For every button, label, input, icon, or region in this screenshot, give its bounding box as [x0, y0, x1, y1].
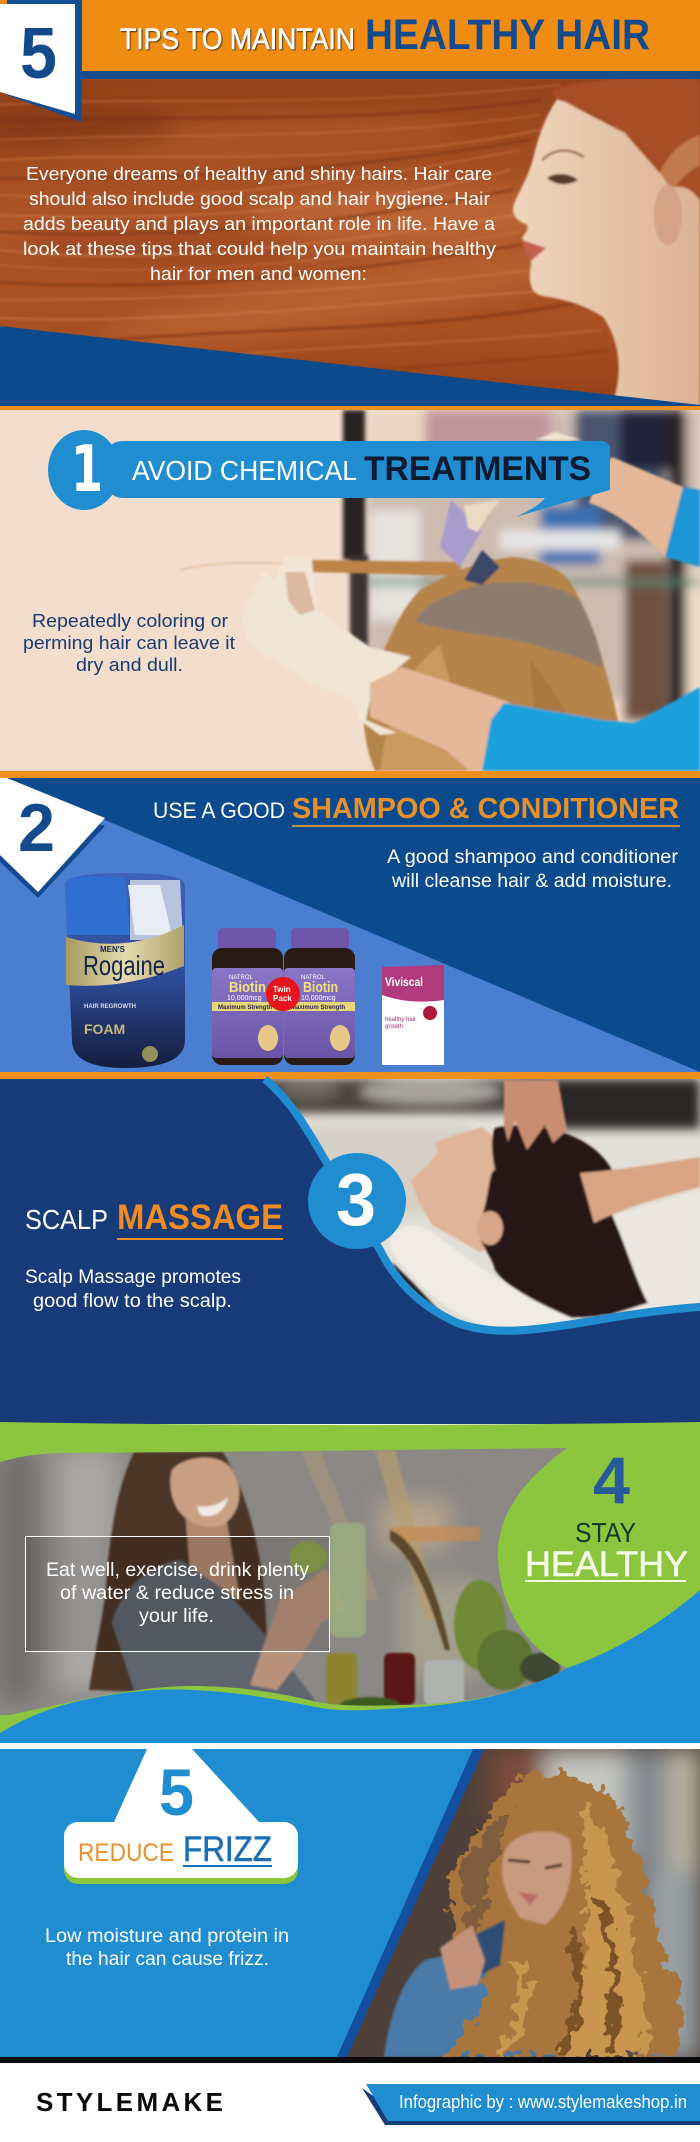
- heading: SHAMPOO & CONDITIONER: [292, 793, 679, 825]
- body text: will cleanse hair & add moisture.: [391, 871, 672, 892]
- panel: tip 5 reduce frizz: [0, 1749, 700, 2063]
- title: HEALTHY HAIR: [365, 11, 650, 59]
- product: Biotin twin pack: 10,000mcg: [227, 995, 262, 1002]
- intro text: Everyone dreams of healthy and shiny hairs. Hair care: [26, 163, 492, 184]
- text box: Eat well, exercise, drink plenty: [46, 1560, 310, 1581]
- body text: [387, 847, 679, 892]
- badge and speech bubble: [48, 430, 610, 517]
- heading: 4 stay healthy: 4: [593, 1443, 630, 1517]
- badge and speech bubble: 1: [71, 433, 103, 507]
- panel: tip 3 scalp massage: [0, 1079, 700, 1424]
- body text: Low moisture and protein in: [45, 1926, 289, 1947]
- comb and brush: [440, 500, 482, 567]
- text box: your life.: [139, 1606, 214, 1627]
- heading badge: 5: [159, 1755, 194, 1829]
- orange divider: [0, 771, 700, 778]
- curved blue edge: [265, 1079, 700, 1331]
- hair: [478, 1125, 648, 1318]
- body text: A good shampoo and conditioner: [387, 847, 679, 868]
- product: Viviscal: growth: [385, 1024, 403, 1030]
- product: Biotin twin pack: Maximum Strength: [291, 1005, 345, 1011]
- header bar: [0, 0, 700, 79]
- product: Rogaine: [65, 873, 185, 1068]
- body text: Scalp Massage promotes: [25, 1267, 241, 1288]
- panel: tip 1 avoid chemical treatments: [0, 410, 700, 778]
- badge and speech bubble: AVOID CHEMICAL: [132, 455, 357, 486]
- photo: woman with apple and bottles: [0, 1445, 600, 1715]
- heading badge: FRIZZ: [183, 1830, 272, 1869]
- hands: [504, 1080, 567, 1150]
- lower blue wave: [0, 1590, 700, 1743]
- product: Biotin twin pack: [212, 928, 355, 1065]
- diagonal stripe: [337, 1749, 490, 2057]
- face: [513, 78, 700, 406]
- forearm: [370, 667, 509, 771]
- photo: salon hair colouring: [0, 410, 700, 771]
- product: Rogaine: MEN'S: [100, 945, 126, 954]
- jacket: [382, 1955, 556, 2057]
- logo wordmark: STYLEMAKE: [36, 2087, 223, 2117]
- face: [502, 1831, 572, 1925]
- credit ribbon: [362, 2084, 700, 2125]
- panel: intro hero: [0, 78, 700, 410]
- body text: [25, 1267, 241, 1312]
- black divider: [0, 2057, 700, 2063]
- product: Viviscal: [382, 965, 444, 1065]
- body text: the hair can cause frizz.: [66, 1949, 269, 1970]
- badge and speech bubble: TREATMENTS: [364, 450, 591, 488]
- heading: [25, 1198, 283, 1240]
- intro text: look at these tips that could help you maintain healthy: [23, 238, 497, 259]
- basin: [390, 1225, 580, 1332]
- orange divider: [0, 406, 700, 410]
- intro text: [23, 163, 497, 284]
- product: Biotin twin pack: Biotin: [303, 979, 338, 996]
- woman hair: [89, 1452, 268, 1695]
- plants: [454, 1580, 506, 1670]
- product: Biotin twin pack: NATROL: [229, 975, 254, 981]
- number badge: 3: 3: [336, 1158, 376, 1241]
- product: Biotin twin pack: Maximum Strength: [218, 1005, 272, 1011]
- arm and apple: [249, 1568, 332, 1692]
- text box: of water & reduce stress in: [60, 1583, 294, 1604]
- diamond badge: 2: [0, 778, 105, 898]
- panel: tip 2 shampoo and conditioner: [0, 778, 700, 1079]
- heading: 4 stay healthy: [525, 1443, 688, 1584]
- body text: [45, 1926, 289, 1970]
- sleeve: [482, 687, 700, 771]
- number badge: 3: [308, 1153, 406, 1249]
- heading badge: [64, 1749, 298, 1884]
- product: Biotin twin pack: Pack: [273, 994, 292, 1003]
- product: Viviscal: Viviscal: [385, 975, 423, 989]
- orange divider: [0, 1072, 700, 1079]
- product: Viviscal: healthy hair: [385, 1017, 416, 1023]
- panel: tip 4 stay healthy: [0, 1422, 700, 1743]
- hair: [180, 432, 700, 771]
- heading: 4 stay healthy: STAY: [575, 1517, 636, 1548]
- blue wedge: [0, 326, 700, 407]
- hand: [440, 1925, 485, 1990]
- ribbon badge: 5: 5: [20, 14, 57, 94]
- intro text: hair for men and women:: [150, 263, 367, 284]
- upper arm: [589, 457, 683, 557]
- shirt: [112, 1560, 317, 1703]
- text box: [26, 1536, 330, 1652]
- title: TIPS TO MAINTAIN: [120, 23, 355, 56]
- face: [170, 1458, 239, 1527]
- heading: MASSAGE: [117, 1198, 283, 1237]
- neck: [185, 1510, 240, 1600]
- ribbon badge: 5: [0, 0, 82, 122]
- heading: USE A GOOD: [153, 798, 285, 823]
- light blue wedge: [0, 778, 700, 1072]
- photo: woman with long red hair: [0, 78, 700, 406]
- product: Rogaine: FOAM: [84, 1021, 125, 1037]
- photo: scalp massage at basin: [260, 1079, 700, 1339]
- face: [410, 1126, 497, 1253]
- product: Biotin twin pack: Biotin: [229, 979, 266, 996]
- title: [120, 11, 650, 59]
- product: Rogaine: Rogaine: [83, 950, 165, 981]
- sink: [598, 1192, 699, 1316]
- intro text: adds beauty and plays an important role in life. Have a: [23, 213, 496, 234]
- body text: good flow to the scalp.: [33, 1291, 232, 1312]
- gloved hand on comb: [464, 500, 500, 532]
- product: Biotin twin pack: NATROL: [301, 975, 326, 981]
- gloved hand holding strand: [281, 558, 412, 737]
- heading: [153, 793, 680, 827]
- diamond badge: 2: 2: [18, 790, 55, 866]
- product: Biotin twin pack: 10,000mcg: [301, 995, 336, 1002]
- body text: [23, 610, 235, 675]
- footer: [36, 2084, 700, 2125]
- body text: perming hair can leave it: [23, 632, 235, 653]
- photo: woman with curly hair: [340, 1749, 700, 2060]
- heading: 4 stay healthy: HEALTHY: [525, 1545, 688, 1584]
- intro text: should also include good scalp and hair hygiene. Hair: [29, 188, 490, 209]
- curly hair mass: [440, 1774, 681, 2057]
- heading: SCALP: [25, 1204, 108, 1235]
- body text: Repeatedly coloring or: [32, 610, 228, 631]
- body text: dry and dull.: [76, 654, 183, 675]
- product: Rogaine: HAIR REGROWTH: [84, 1004, 136, 1010]
- heading badge: REDUCE: [78, 1839, 174, 1867]
- bottles: [326, 1653, 357, 1705]
- product: Biotin twin pack: Twin: [273, 985, 291, 994]
